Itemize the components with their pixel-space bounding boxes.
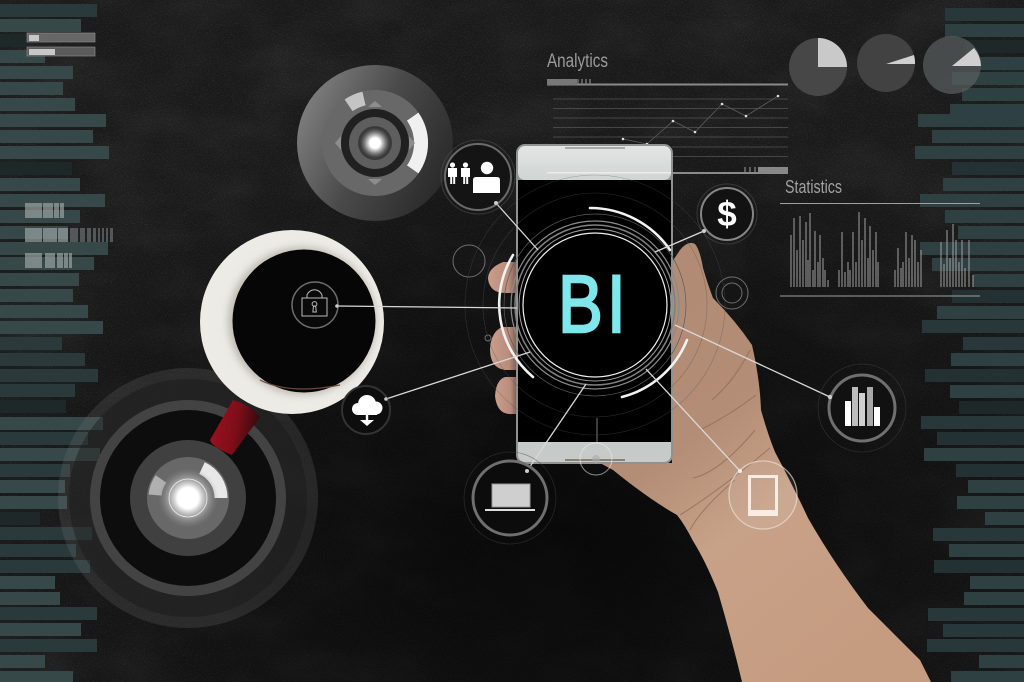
icon: laptop <box>485 484 535 511</box>
dial: bottom left radial widget <box>58 368 318 628</box>
dial: top left radial widget <box>297 65 453 221</box>
BI label: BI <box>558 258 626 349</box>
phone screen <box>518 180 671 442</box>
statistics chart <box>780 176 980 296</box>
finger one <box>488 262 517 293</box>
analytics frame lines <box>547 79 788 173</box>
analytics chart <box>547 51 788 173</box>
analytics title: Analytics <box>547 51 608 72</box>
pie one <box>789 38 847 96</box>
icon: bars <box>845 387 880 426</box>
smartphone <box>516 144 673 464</box>
finger three <box>495 377 517 414</box>
statistics title: Statistics <box>785 176 842 197</box>
icon: tablet <box>749 476 777 516</box>
palm creases <box>680 350 770 530</box>
hub rings <box>465 175 725 435</box>
coffee cup <box>200 230 384 455</box>
cup handle <box>210 400 260 455</box>
node: tablet <box>729 461 797 529</box>
statistics bars <box>791 212 973 287</box>
hand holding phone <box>488 243 931 682</box>
node: lock <box>292 282 339 328</box>
icon: cloud download <box>352 395 382 426</box>
node: people <box>441 140 515 214</box>
pie three <box>923 36 981 94</box>
statistics frame lines <box>780 204 980 296</box>
block strip widgets left <box>25 203 113 268</box>
small grey arc <box>155 479 161 495</box>
icon: person <box>473 162 500 193</box>
icon: padlock <box>302 290 327 316</box>
left edge bar pattern <box>0 4 109 682</box>
node: laptop <box>464 452 556 544</box>
hub bright arcs <box>499 208 687 397</box>
thumb, palm and forearm <box>600 243 931 682</box>
node: dollar <box>697 184 757 244</box>
node: cloud <box>342 386 390 434</box>
dial grey segment <box>349 98 364 105</box>
phone top bezel <box>518 146 671 180</box>
dial white segment <box>413 117 421 169</box>
connector lines <box>337 203 830 471</box>
small decorative circles <box>453 245 748 475</box>
icon: small figures <box>448 162 470 184</box>
right edge bar pattern <box>915 8 1024 682</box>
node: bar chart <box>818 364 906 452</box>
coffee surface <box>232 250 376 392</box>
pie two <box>857 34 915 92</box>
progress bar widgets top left <box>27 33 95 56</box>
finger two <box>490 327 517 370</box>
BI hub <box>465 175 725 435</box>
analytics trend line <box>622 95 779 145</box>
pie charts <box>789 34 981 96</box>
large white arc <box>202 468 221 498</box>
phone bottom bezel <box>518 442 671 462</box>
icon: dollar sign: $ <box>717 195 737 234</box>
